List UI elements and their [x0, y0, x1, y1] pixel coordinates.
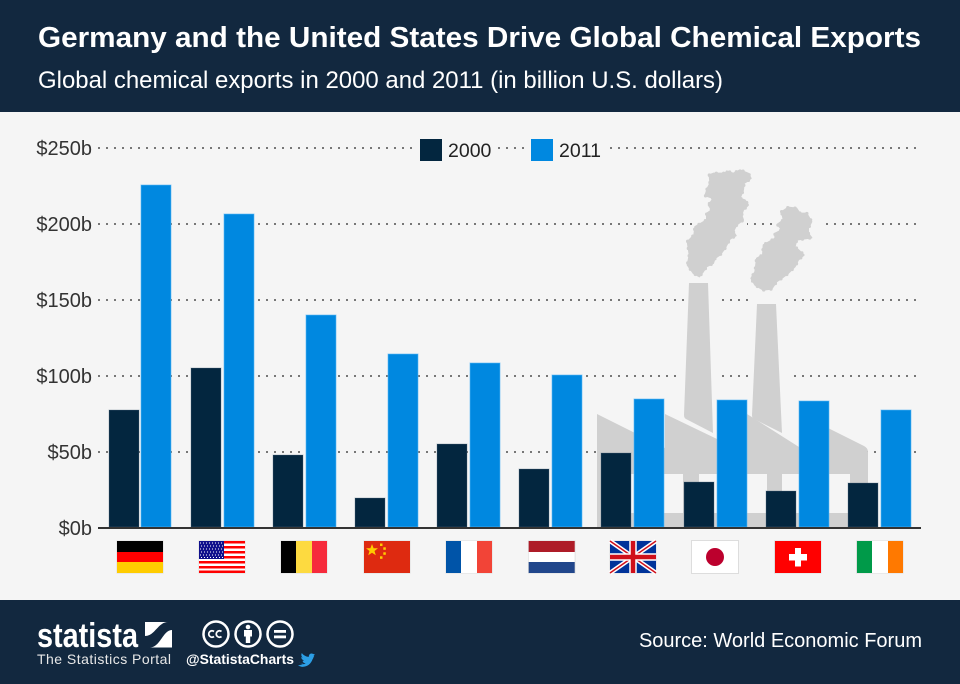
y axis labels: $50b	[48, 442, 92, 464]
y axis labels: $250b	[36, 138, 92, 160]
statista logo	[37, 617, 172, 667]
legend: 2011	[559, 140, 601, 162]
flag: United States	[198, 540, 246, 574]
icon: twitter bird	[298, 653, 315, 667]
bars: 2011	[141, 185, 911, 527]
flag: Switzerland	[774, 540, 822, 574]
flag: Netherlands	[528, 540, 576, 574]
gridline gaps	[414, 144, 820, 380]
subtitle: Global chemical exports in 2000 and 2011 (in billion U.S. dollars)	[38, 67, 723, 94]
gridlines	[98, 148, 920, 452]
flag: Ireland	[856, 540, 904, 574]
flag: France	[446, 540, 492, 574]
flag: Japan	[691, 540, 739, 574]
licence icons	[204, 622, 292, 646]
header band	[0, 0, 960, 112]
y axis labels: $100b	[36, 366, 92, 388]
twitter handle: @StatistaCharts	[186, 652, 294, 667]
source: Source: World Economic Forum	[639, 630, 922, 652]
bar chart	[98, 185, 921, 529]
statista logo: The Statistics Portal	[37, 651, 171, 667]
y axis labels	[36, 138, 92, 540]
flag: Belgium	[280, 540, 328, 574]
legend	[420, 139, 601, 162]
y axis labels: $0b	[59, 518, 92, 540]
bars: 2000	[109, 368, 878, 527]
y axis labels: $200b	[36, 214, 92, 236]
factory illustration	[597, 170, 868, 527]
y axis labels: $150b	[36, 290, 92, 312]
statista logo: statista	[37, 617, 139, 655]
title: Germany and the United States Drive Global Chemical Exports	[38, 22, 921, 54]
flag: China	[364, 540, 410, 574]
footer band	[0, 600, 960, 684]
legend: 2000	[448, 140, 492, 162]
flag: United Kingdom	[610, 540, 656, 574]
flag: Germany	[116, 540, 164, 574]
